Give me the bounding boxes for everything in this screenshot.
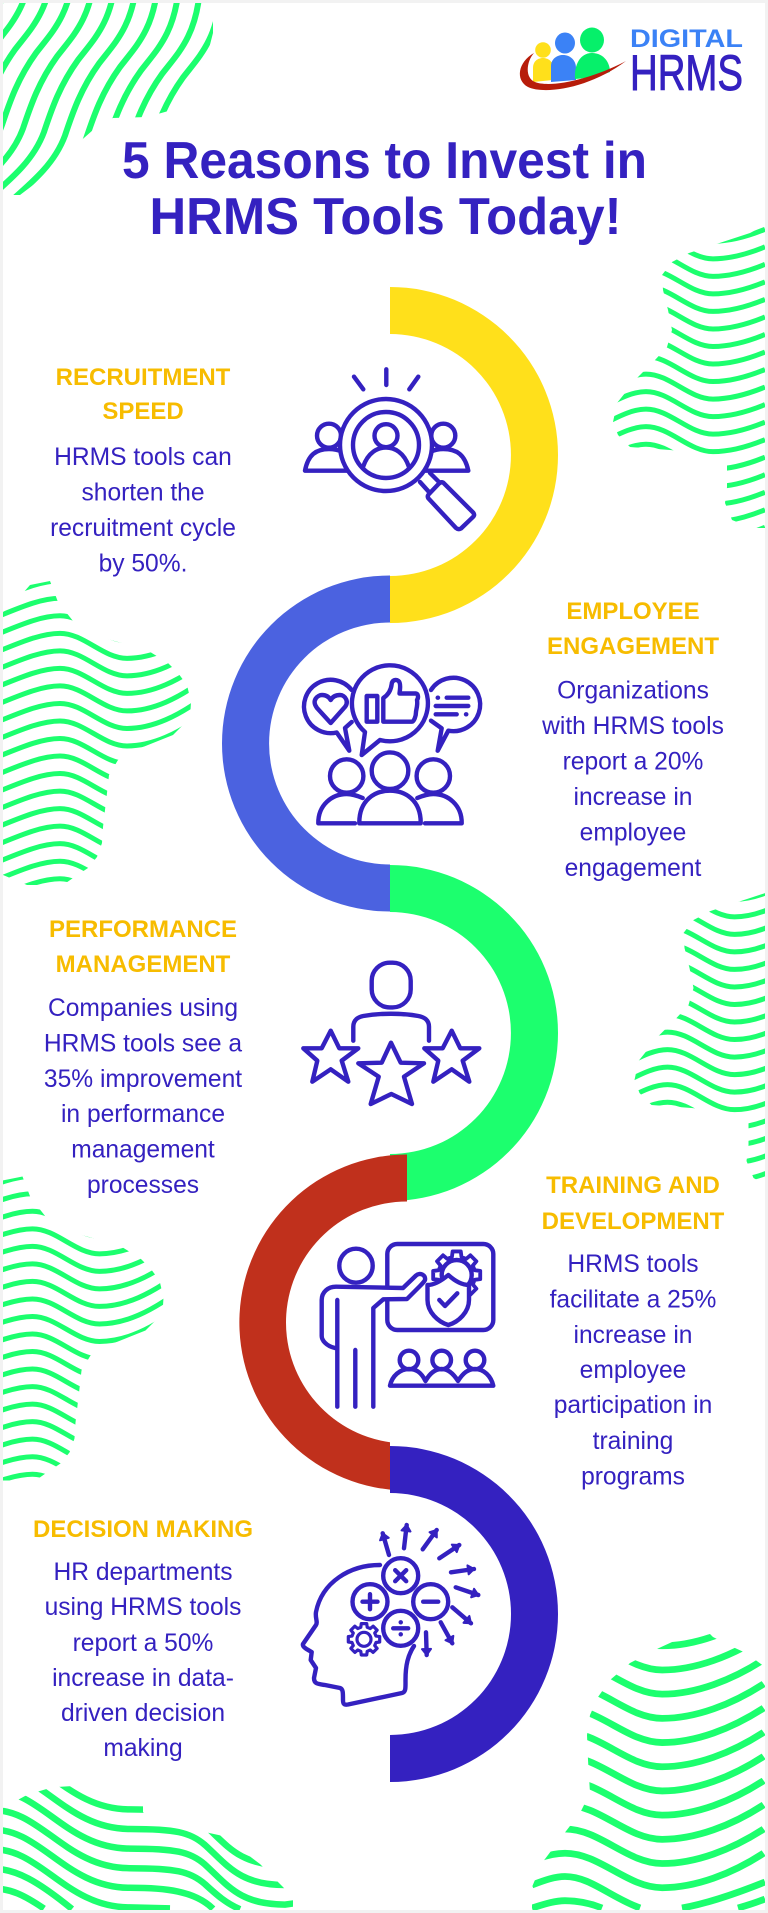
ribbon segment: blue <box>222 576 390 912</box>
text: performance management: management <box>71 1137 215 1164</box>
icon: head with math operators and arrows <box>303 1525 478 1705</box>
text: employee engagement: Organizations <box>557 678 709 704</box>
icon: person with three stars <box>303 963 479 1104</box>
text: training and development: HRMS tools <box>567 1251 699 1278</box>
text: decision making: HR departments <box>53 1559 233 1586</box>
title: 5 Reasons to Invest in <box>122 132 647 190</box>
text: performance management: Companies using <box>48 995 238 1022</box>
wave blob: lower left <box>0 1159 168 1506</box>
ribbon segment: red <box>239 1154 407 1490</box>
panel: decision making <box>33 1516 478 1762</box>
heading: training and development: DEVELOPMENT <box>542 1208 725 1235</box>
text: training and development: increase in <box>574 1322 692 1349</box>
icon: thumbs-up feedback bubbles over people <box>304 665 480 823</box>
text: recruitment speed: recruitment cycle <box>50 515 236 542</box>
text: training and development: programs <box>581 1464 685 1490</box>
heading: decision making: DECISION MAKING <box>33 1516 253 1543</box>
ribbon segment: yellow <box>390 287 558 623</box>
text: recruitment speed: shorten the <box>81 480 205 506</box>
heading: training and development <box>542 1172 725 1235</box>
text: decision making: making <box>103 1735 183 1762</box>
ribbon segment: green <box>390 865 558 1201</box>
panel: recruitment speed <box>50 364 474 578</box>
title <box>122 132 647 246</box>
panel: performance management <box>44 916 479 1199</box>
serpentine ribbon <box>222 287 558 1782</box>
heading: recruitment speed: RECRUITMENT <box>56 364 231 391</box>
icon: magnifier over people <box>305 369 474 529</box>
wave blob: upper right <box>613 227 765 528</box>
text: recruitment speed: by 50%. <box>99 550 187 578</box>
text: performance management: in performance <box>61 1101 225 1128</box>
panel: training and development <box>322 1172 725 1490</box>
text: recruitment speed: HRMS tools can <box>54 444 232 471</box>
text: employee engagement: with HRMS tools <box>541 713 724 740</box>
heading: employee engagement: EMPLOYEE <box>566 598 700 625</box>
text: performance management <box>44 995 242 1199</box>
heading: performance management <box>49 916 237 978</box>
wave blob: bottom left <box>3 1786 293 1910</box>
text: employee engagement: employee <box>580 820 686 846</box>
ribbon segment: purple <box>390 1446 558 1782</box>
heading: employee engagement: ENGAGEMENT <box>547 633 719 660</box>
text: performance management: processes <box>87 1172 199 1199</box>
text: training and development <box>550 1251 716 1490</box>
text: decision making: report a 50% <box>73 1630 213 1657</box>
heading: training and development: TRAINING AND <box>546 1172 720 1199</box>
text: employee engagement: increase in <box>574 784 692 811</box>
text: training and development: training <box>593 1428 673 1455</box>
logo: Digital HRMS <box>520 25 743 101</box>
text: recruitment speed <box>50 444 236 578</box>
wave blob: middle right <box>634 893 765 1180</box>
heading: performance management: MANAGEMENT <box>56 951 231 978</box>
text: decision making: increase in data- <box>52 1665 234 1692</box>
panel: employee engagement <box>304 598 724 882</box>
text: training and development: employee <box>580 1357 686 1384</box>
wave blob: bottom right <box>532 1634 765 1910</box>
heading: performance management: PERFORMANCE <box>49 916 237 943</box>
heading: employee engagement <box>547 598 719 660</box>
logo: Digital HRMS: DIGITAL <box>630 25 743 53</box>
icon: presenter with board and audience <box>322 1244 493 1407</box>
text: training and development: facilitate a 25% <box>550 1286 716 1314</box>
text: employee engagement: report a 20% <box>563 748 703 776</box>
text: employee engagement: engagement <box>565 855 702 882</box>
text: decision making: driven decision <box>61 1700 225 1727</box>
wave blob: middle left <box>0 563 195 911</box>
text: decision making <box>45 1559 241 1762</box>
text: employee engagement <box>541 678 724 882</box>
heading: recruitment speed: SPEED <box>102 398 184 425</box>
wave blob: top left <box>3 3 213 195</box>
title: HRMS Tools Today! <box>150 188 622 246</box>
text: training and development: participation in <box>554 1392 712 1419</box>
text: performance management: 35% improvement <box>44 1066 242 1093</box>
text: performance management: HRMS tools see a <box>44 1030 242 1057</box>
text: decision making: using HRMS tools <box>45 1594 241 1621</box>
heading: recruitment speed <box>56 364 231 425</box>
